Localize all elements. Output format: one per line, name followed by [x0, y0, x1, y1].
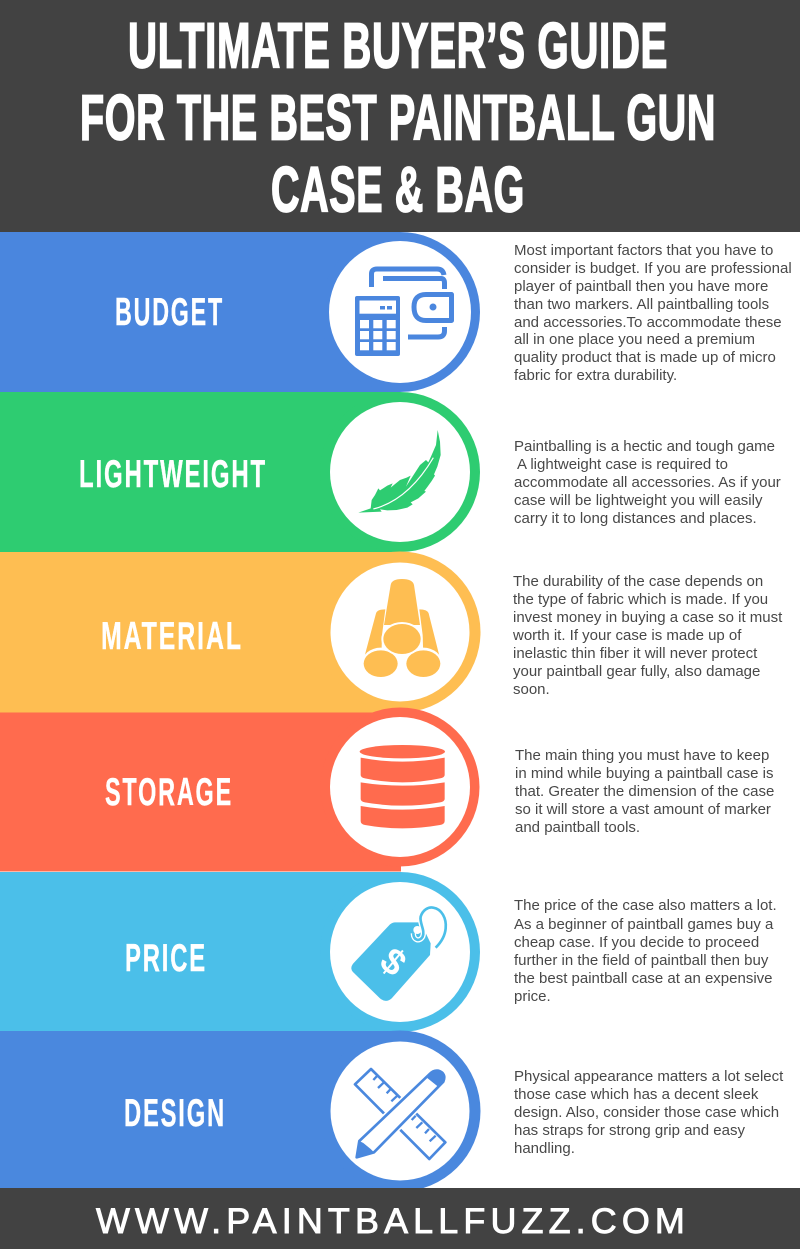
text: storage description: in mind while buying a paintball case is: [515, 765, 773, 782]
icon: ruler and pencil: [355, 1069, 445, 1159]
text: material description: the type of fabric which is made. If you: [513, 591, 768, 608]
panel: lightweight: [0, 392, 781, 552]
text: lightweight description: carry it to long distances and places.: [514, 510, 757, 527]
text: budget description: quality product that is made up of micro: [514, 349, 776, 366]
text: material description: worth it. If your case is made up of: [512, 627, 742, 644]
text: design description: Physical appearance matters a lot select: [514, 1068, 784, 1085]
text: budget description: Most important factors that you have to: [514, 242, 773, 259]
text: lightweight description: case will be lightweight you will easily: [514, 492, 763, 509]
heading: price: PRICE: [125, 937, 207, 980]
footer banner with website: [0, 1188, 800, 1249]
text: lightweight description: [514, 438, 781, 527]
text: material description: The durability of the case depends on: [513, 573, 763, 590]
panel: material: [0, 552, 783, 712]
panel: storage: [0, 708, 774, 872]
text: lightweight description: accommodate all accessories. As if your: [514, 474, 781, 491]
icon: database stack: [360, 745, 445, 828]
text: budget description: consider is budget. If you are professional: [514, 260, 792, 277]
heading: budget: BUDGET: [115, 291, 224, 334]
text: budget description: [514, 242, 792, 384]
icon: feather: [358, 430, 441, 513]
text: price description: cheap case. If you decide to proceed: [514, 934, 759, 951]
header banner with title: [0, 0, 800, 232]
panel: design: [0, 1030, 784, 1192]
text: price description: [514, 897, 777, 1005]
text: budget description: all in one place you need a premium: [514, 331, 755, 348]
text: storage description: [515, 747, 774, 836]
text: material description: your paintball gear fully, also damage: [513, 663, 760, 680]
text: price description: As a beginner of paintball games buy a: [514, 916, 774, 933]
heading: material: MATERIAL: [101, 615, 243, 658]
text: price description: the best paintball case at an expensive: [514, 970, 773, 987]
panel: price: [0, 872, 777, 1032]
icon: rolls of material: [362, 579, 442, 678]
text: design description: those case which has a decent sleek: [514, 1086, 759, 1103]
text: budget description: fabric for extra durability.: [514, 367, 677, 384]
panel: budget: [0, 232, 792, 392]
text: storage description: The main thing you must have to keep: [515, 747, 769, 764]
text: material description: invest money in buying a case so it must: [513, 609, 783, 626]
text: budget description: and accessories.To accommodate these: [514, 314, 782, 331]
text: design description: handling.: [514, 1140, 575, 1157]
text: storage description: that. Greater the dimension of the case: [515, 783, 774, 800]
icon: wallet and calculator: [355, 269, 452, 356]
heading: lightweight: LIGHTWEIGHT: [79, 453, 267, 496]
text: lightweight description: A lightweight case is required to: [517, 456, 728, 473]
heading: design: DESIGN: [124, 1092, 226, 1135]
text: budget description: player of paintball then you have more: [514, 278, 768, 295]
text: material description: soon.: [513, 681, 550, 698]
text: price description: further in the field of paintball then buy: [514, 952, 769, 969]
text: design description: design. Also, consider those case which: [514, 1104, 779, 1121]
icon: price tag: [351, 907, 446, 1001]
text: price description: The price of the case also matters a lot.: [514, 897, 777, 914]
header banner with title: CASE & BAG: [271, 154, 525, 226]
text: design description: has straps for strong grip and easy: [514, 1122, 745, 1139]
text: material description: [512, 573, 783, 698]
text: storage description: and paintball tools.: [515, 819, 640, 836]
heading: storage: STORAGE: [105, 771, 233, 814]
text: budget description: than two markers. All paintballing tools: [514, 296, 769, 313]
text: material description: inelastic thin fiber it will never protect: [513, 645, 758, 662]
text: lightweight description: Paintballing is a hectic and tough game: [514, 438, 775, 455]
text: price description: price.: [514, 988, 551, 1005]
text: design description: [514, 1068, 784, 1157]
footer banner with website: WWW.PAINTBALLFUZZ.COM: [96, 1202, 690, 1241]
text: storage description: so it will store a vast amount of marker: [515, 801, 771, 818]
icon: price tag: $: [372, 939, 414, 984]
